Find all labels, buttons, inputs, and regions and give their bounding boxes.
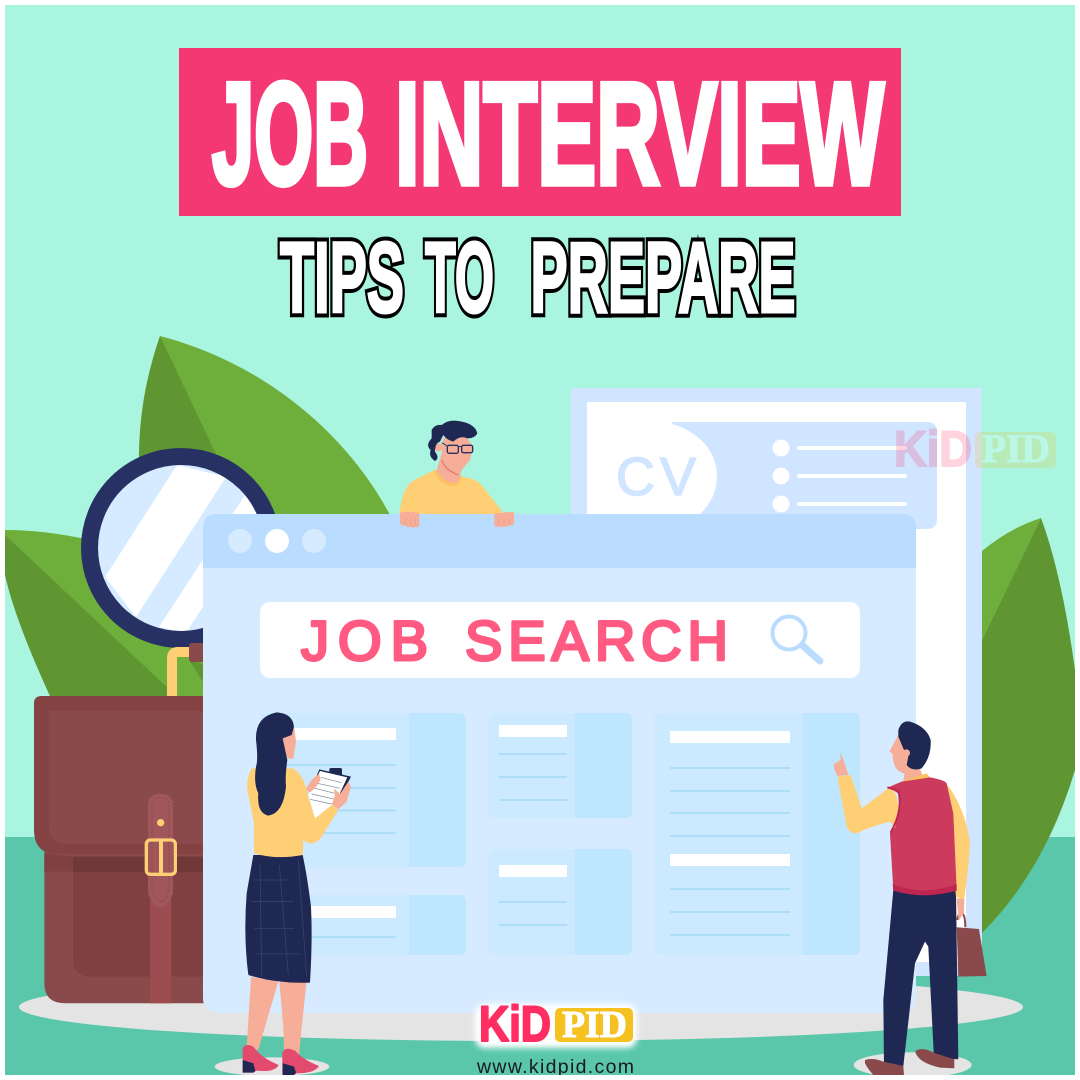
magnifying glass bbox=[90, 456, 272, 696]
person behind window bbox=[399, 421, 505, 515]
floor bbox=[5, 837, 1075, 1075]
title banner: JOB bbox=[212, 53, 368, 215]
subtitle: PREPARE bbox=[530, 222, 796, 334]
job card middle top bbox=[488, 713, 632, 818]
woman with clipboard bbox=[215, 712, 351, 1076]
hands on window edge bbox=[400, 512, 514, 528]
shoes bbox=[243, 1045, 279, 1073]
briefcase in hand bbox=[957, 913, 987, 977]
job card middle bottom bbox=[488, 849, 632, 955]
job card right bbox=[654, 713, 860, 955]
subtitle: TIPS bbox=[280, 222, 404, 334]
hair bbox=[428, 421, 477, 461]
subtitle bbox=[280, 222, 796, 334]
pants bbox=[883, 890, 958, 1066]
watermark logo: KiD bbox=[894, 421, 972, 477]
briefcase bbox=[34, 696, 207, 1003]
clipboard bbox=[308, 768, 351, 818]
hair bbox=[898, 721, 931, 769]
watermark logo bbox=[894, 421, 1056, 477]
subtitle: TO bbox=[425, 222, 494, 334]
far sleeve bbox=[945, 782, 970, 899]
job card left bottom bbox=[260, 895, 466, 955]
man pointing bbox=[834, 721, 987, 1078]
kidpid logo: PID bbox=[562, 1004, 627, 1046]
browser window bbox=[203, 514, 916, 1013]
cv document bbox=[571, 388, 982, 976]
search bar bbox=[260, 602, 860, 678]
neck and head bbox=[903, 768, 923, 782]
cv tag bbox=[616, 422, 937, 529]
glasses bbox=[442, 443, 462, 447]
title banner bbox=[179, 48, 901, 216]
subtitle: TO bbox=[425, 222, 494, 334]
search bar: JOB bbox=[301, 609, 428, 672]
ground shadow bbox=[215, 1057, 329, 1076]
search bar: SEARCH bbox=[465, 609, 728, 672]
cv tag: CV bbox=[616, 447, 696, 507]
kidpid logo: KiD bbox=[479, 996, 551, 1052]
face bbox=[282, 727, 296, 759]
neck and face bbox=[437, 433, 473, 483]
shirt bbox=[399, 470, 505, 515]
vest bbox=[888, 777, 957, 895]
legs bbox=[247, 977, 278, 1050]
hair bbox=[255, 712, 294, 816]
ground shadow bbox=[854, 1052, 972, 1078]
floor shadow ellipse bbox=[19, 973, 1023, 1041]
kidpid logo bbox=[475, 996, 637, 1052]
website url: www.kidpid.com bbox=[476, 1056, 634, 1078]
hands bbox=[306, 774, 321, 792]
pointing arm bbox=[837, 775, 898, 833]
subtitle: PREPARE bbox=[530, 222, 796, 334]
shoes bbox=[865, 1059, 904, 1075]
collar bbox=[902, 773, 930, 783]
leaf: back left bbox=[139, 336, 390, 560]
leaf: right bbox=[982, 518, 1075, 933]
skirt bbox=[245, 855, 312, 983]
icon: search bbox=[772, 616, 820, 661]
watermark logo: PID bbox=[982, 426, 1050, 471]
subtitle: TIPS bbox=[280, 222, 404, 334]
leaf: front left bbox=[5, 530, 203, 696]
job card left top bbox=[260, 713, 466, 867]
top bbox=[247, 768, 338, 857]
